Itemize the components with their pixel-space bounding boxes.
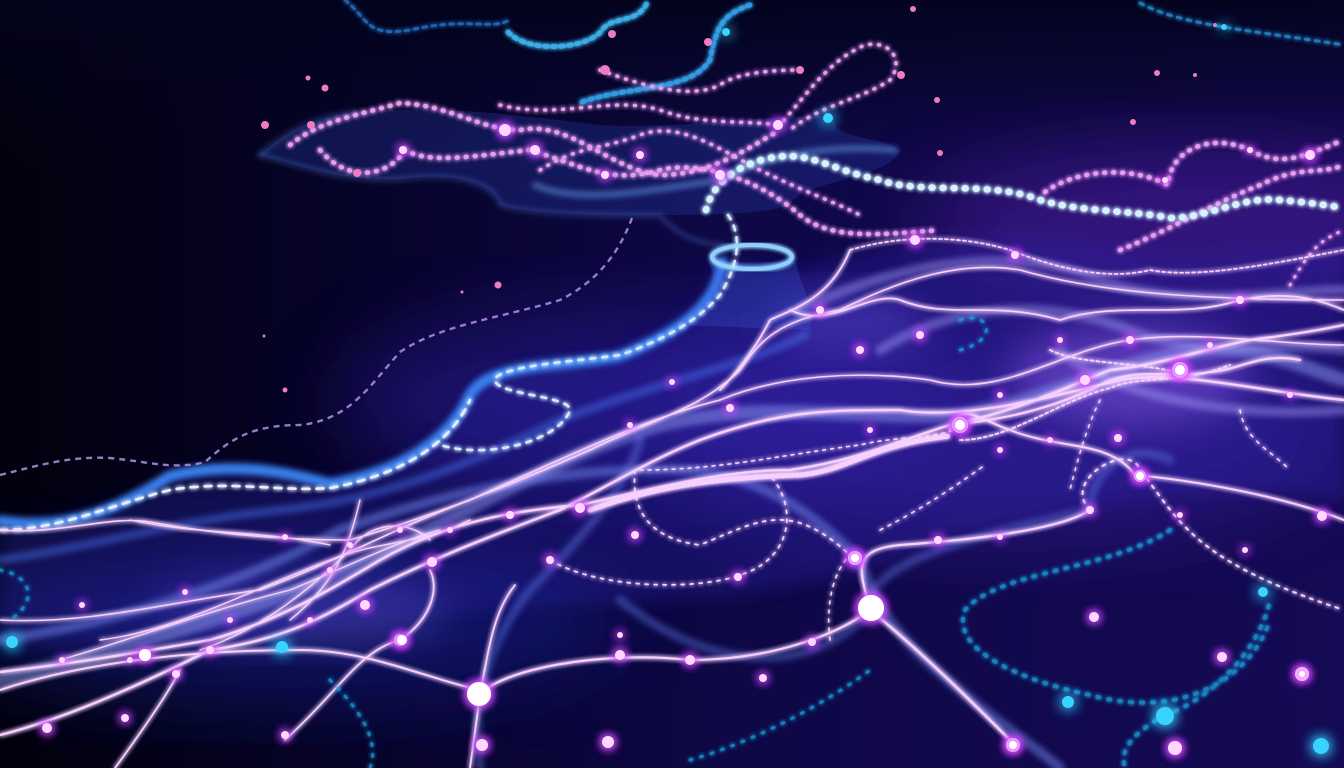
ring: [680, 245, 811, 330]
pink web: central mesh: [0, 239, 1344, 768]
pink web: upper strands: [290, 44, 1344, 285]
bright blue dotted strand: [0, 156, 1344, 530]
pink sparks in the sky: [261, 6, 1217, 392]
translucent terrain: upper left blob: [258, 110, 900, 245]
cyan dotted strands at the bottom right: [0, 318, 1270, 768]
dashed outer strand: [0, 218, 632, 475]
pink glowing nodes: [42, 120, 1327, 755]
brightest light nodes: [139, 365, 1305, 749]
translucent terrain: lower field: [0, 236, 1344, 647]
blue streams near the top: [345, 0, 1344, 102]
